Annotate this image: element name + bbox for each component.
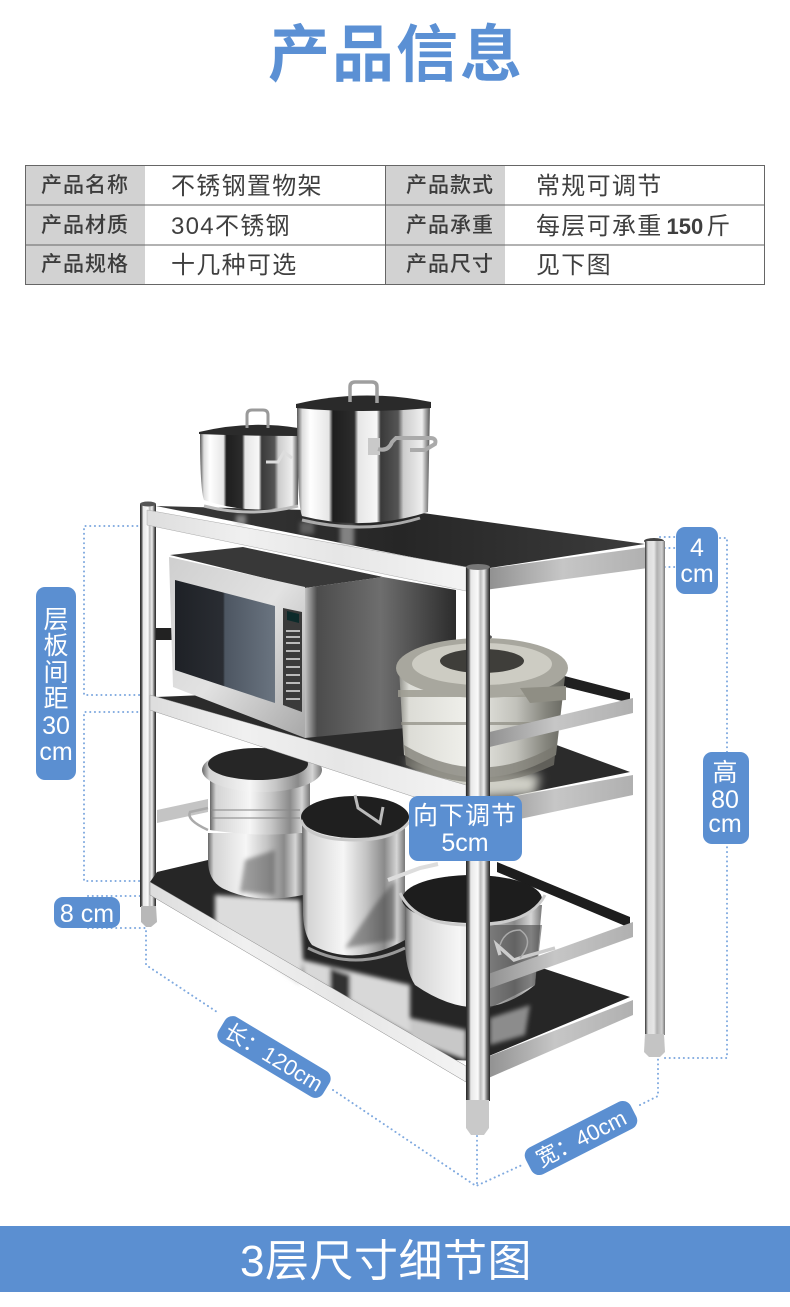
label: height 80cm [703,752,749,844]
back rail at top of second level [553,673,630,703]
small pot on top shelf [199,410,298,512]
microwave top [170,547,383,588]
row 1 left: 产品名称 [41,174,129,197]
dimension dotted lines [84,526,727,1186]
label: adjust down 5cm: 5cm [441,829,489,857]
label: shelf spacing 30cm: 30 [42,712,70,740]
middle shelf right bar [477,775,633,828]
row 2 left: 产品材质 [41,214,129,237]
row 3 right: 产品尺寸 [406,253,494,276]
label: shelf spacing 30cm: 间 [43,659,69,687]
microwave control panel [283,608,302,712]
row 1 left [41,173,323,200]
large pot on top shelf [296,382,435,527]
row 2 left: 304不锈钢 [171,213,291,240]
mid side rail [477,698,633,750]
pot lower right [400,875,555,1008]
middle shelf surface [156,690,630,803]
row 1 right [406,173,662,200]
footer banner: 3层尺寸细节图 [240,1237,532,1286]
label: shelf spacing 30cm: cm [39,738,73,766]
middle shelf front bar [150,695,466,814]
top shelf surface [156,506,645,570]
label: width 40cm [522,1098,640,1178]
label: adjust down 5cm [409,796,522,861]
label: height 80cm: 高 [712,759,738,787]
title: 产品信息 [268,21,524,90]
microwave front [169,557,305,738]
label: height 80cm: 80 [711,786,739,814]
label: shelf spacing 30cm: 层 [43,606,69,634]
label: shelf spacing 30cm: 距 [43,685,69,713]
left post [140,502,157,927]
row 2 right [406,213,732,240]
label: shelf spacing 30cm [36,587,76,780]
top shelf reflections [236,515,354,547]
middle shelf reflection [405,760,540,800]
row 3 right [406,252,612,279]
label: width 40cm: 宽：40cm [532,1105,630,1172]
row 2 left [41,213,291,240]
back left rails [156,628,208,823]
row 3 left [41,252,298,279]
top shelf front bar [147,510,466,591]
label: 8cm: 8 cm [60,900,114,928]
label: adjust down 5cm: 向下调节 [413,802,517,830]
label: shelf spacing 30cm: 板 [43,632,69,660]
bottom shelf surface [150,860,630,1061]
footer banner [0,1226,790,1292]
label: height 80cm: cm [708,810,742,838]
row 1 left: 不锈钢置物架 [171,173,323,200]
label: length 120cm: 长：120cm [220,1018,327,1096]
front post [466,564,490,1135]
bottom shelf back rail [497,862,630,928]
shelving rack with contents [140,382,665,1135]
pot white lid on middle shelf [396,634,568,782]
row 2 right: 每层可承重150斤 [536,213,732,240]
row 3 left: 十几种可选 [171,252,298,279]
pot lower left [189,748,322,899]
bottom side rail [477,922,633,993]
row 1 right: 常规可调节 [536,173,662,200]
label: 4cm [676,527,718,594]
label: 4cm: cm [680,560,714,588]
bottom shelf right bar [477,1000,633,1083]
floor reflections [215,895,530,1060]
row 2 right: 产品承重 [406,214,494,237]
microwave window [175,580,275,703]
bottom shelf front bar [150,882,466,1082]
top shelf right bar [477,547,648,591]
spec table [25,165,765,285]
label: 4cm: 4 [690,534,704,562]
right post [644,538,665,1057]
microwave [169,547,456,738]
row 3 right: 见下图 [536,252,612,279]
microwave side [305,577,456,738]
right post front overlay [645,541,665,841]
row 1 right: 产品款式 [406,174,494,197]
pot center lower [301,795,438,960]
row 3 left: 产品规格 [41,253,129,276]
